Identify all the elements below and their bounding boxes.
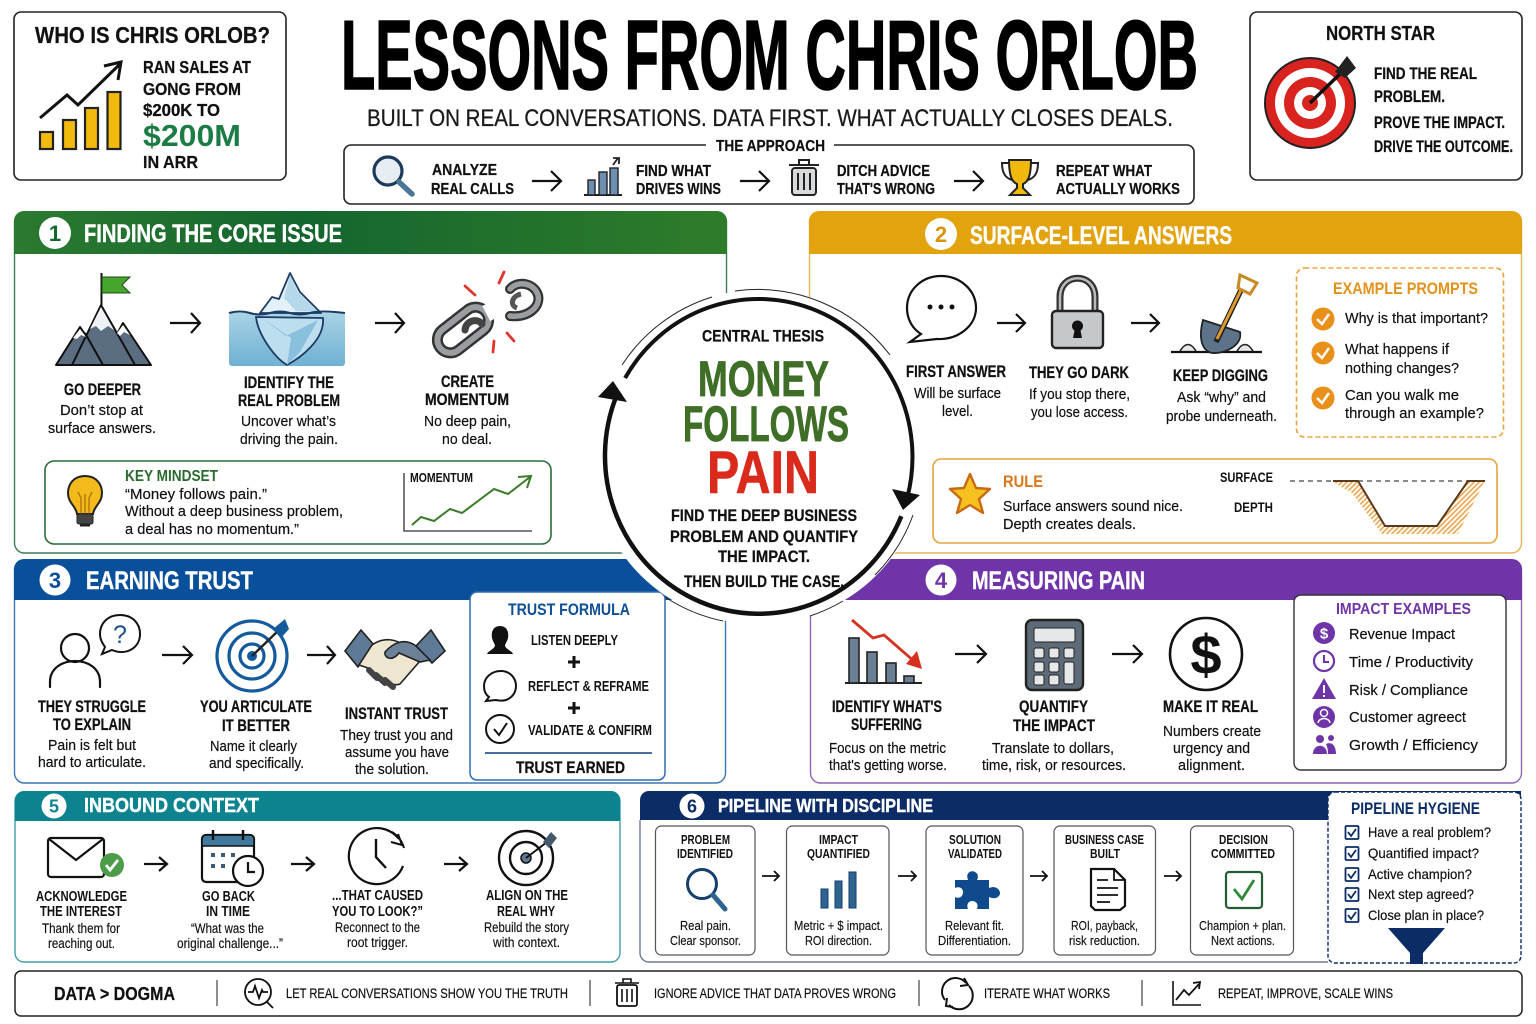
- step: they go dark: THEY GO DARK: [1029, 364, 1129, 382]
- text: prompts: nothing changes?: [1345, 360, 1459, 377]
- icon: magnifier: [374, 157, 412, 194]
- card: impact quantified: QUANTIFIED: [807, 846, 870, 861]
- text: rule: [1003, 472, 1183, 533]
- step: that caused you to look: Reconnect to the: [335, 920, 420, 935]
- card: solution validated: [926, 826, 1023, 955]
- icon: revenue: $: [1320, 626, 1329, 642]
- step: acknowledge: ACKNOWLEDGE: [36, 889, 127, 905]
- icon: calculator: [1026, 620, 1083, 690]
- card: impact quantified: Metric + $ impact.: [794, 918, 883, 933]
- text: prompts: Why is that important?: [1345, 310, 1488, 327]
- panel: the approach: [344, 138, 1194, 204]
- badge 6: 6: [687, 796, 697, 816]
- card: decision committed: Champion + plan.: [1199, 918, 1286, 933]
- heading 2: SURFACE-LEVEL ANSWERS: [970, 222, 1232, 250]
- step: identify the real problem: Uncover what’s: [241, 413, 336, 430]
- arrow: [898, 871, 916, 881]
- step: you articulate: and specifically.: [209, 755, 304, 772]
- icon: shovel: [1171, 275, 1262, 353]
- header 1: [14, 211, 727, 254]
- text: prompts: Can you walk me: [1345, 387, 1459, 404]
- icon: padlock: [1052, 278, 1103, 348]
- callout: key mindset: [45, 461, 551, 544]
- step: quantify the impact: time, risk, or resources.: [982, 757, 1126, 774]
- icon: confused person: ?: [113, 621, 127, 649]
- text: north star lines: PROVE THE IMPACT.: [1374, 114, 1505, 132]
- card: problem identified: Real pain.: [680, 918, 731, 933]
- step: you articulate: IT BETTER: [222, 717, 290, 735]
- step: you articulate: [200, 698, 312, 772]
- badge 5: [42, 794, 66, 818]
- text: formula: [485, 633, 652, 777]
- text: formula: REFLECT & REFRAME: [528, 679, 649, 695]
- icon: iceberg: [229, 273, 345, 366]
- step: ditch advice: DITCH ADVICE: [837, 163, 930, 180]
- icon: email check: [48, 838, 124, 877]
- step: identify what's suffering: IDENTIFY WHAT'S: [832, 698, 942, 716]
- step: identify the real problem: IDENTIFY THE: [244, 374, 334, 392]
- text: impact list: Time / Productivity: [1349, 654, 1473, 671]
- heading: north star: NORTH STAR: [1326, 23, 1435, 45]
- step: they struggle: hard to articulate.: [38, 754, 146, 771]
- icon: trend chart: [1173, 981, 1201, 1005]
- badge 2: 2: [935, 222, 947, 247]
- text: rule: RULE: [1003, 472, 1043, 491]
- card: decision committed: COMMITTED: [1211, 846, 1275, 861]
- chart: momentum line: [404, 471, 532, 531]
- heading: trust formula: TRUST FORMULA: [508, 601, 630, 619]
- icon: dollar circle: [1170, 618, 1242, 690]
- card: business case built: BUILT: [1090, 846, 1120, 861]
- diagram: surface versus depth: [1220, 470, 1485, 534]
- step: that caused you to look: [332, 888, 423, 950]
- text: impact list: Growth / Efficiency: [1349, 737, 1479, 754]
- step: find what drives wins: FIND WHAT: [636, 163, 711, 180]
- subtitle: BUILT ON REAL CONVERSATIONS. DATA FIRST. WHAT ACTUALLY CLOSES DEALS.: [367, 105, 1173, 132]
- card: solution validated: VALIDATED: [948, 846, 1002, 861]
- step: go deeper: GO DEEPER: [64, 381, 141, 399]
- heading 5: INBOUND CONTEXT: [84, 795, 259, 817]
- step: they struggle: [38, 698, 146, 771]
- icon: blue target: [217, 619, 289, 691]
- icon: handshake: [345, 630, 445, 687]
- step: instant trust: assume you have: [345, 744, 449, 761]
- heading 4: MEASURING PAIN: [972, 567, 1145, 595]
- icon: calendar and clock: [202, 830, 263, 886]
- step: create momentum: no deal.: [442, 431, 492, 448]
- icon: people: [1313, 735, 1336, 754]
- step: identify the real problem: [238, 374, 340, 448]
- step: make it real: urgency and: [1173, 740, 1250, 757]
- step: first answer: Will be surface: [914, 385, 1001, 402]
- text: rule: Depth creates deals.: [1003, 516, 1136, 533]
- icon: person silhouette: [487, 626, 513, 654]
- step: align on the real why: [484, 888, 569, 950]
- icon: trophy: [1002, 160, 1038, 195]
- icon: check 3: [1312, 386, 1334, 410]
- icon: revenue: [1313, 622, 1335, 644]
- step: make it real: MAKE IT REAL: [1163, 698, 1258, 716]
- text: impact list: Customer agreect: [1349, 709, 1467, 726]
- heading 3: EARNING TRUST: [86, 567, 253, 595]
- card: problem identified: [656, 826, 755, 955]
- thin outer arcs: [622, 289, 913, 621]
- step: make it real: alignment.: [1178, 757, 1245, 774]
- step: align on the real why: with context.: [492, 935, 560, 950]
- step: they struggle: Pain is felt but: [48, 737, 137, 754]
- arrow: [740, 171, 769, 191]
- chart: momentum line: MOMENTUM: [410, 471, 473, 485]
- panel 1: finding the core issue: [14, 211, 727, 553]
- arrow: [955, 645, 986, 663]
- arrow: [1030, 871, 1047, 881]
- step: instant trust: They trust you and: [340, 727, 453, 744]
- icon: target: [1265, 56, 1356, 148]
- step: they go dark: If you stop there,: [1029, 386, 1130, 403]
- step: keep digging: Ask “why” and: [1177, 389, 1266, 406]
- text: ARR story: $200K TO: [143, 100, 220, 120]
- text: formula: TRUST EARNED: [516, 759, 625, 777]
- icon: align target: [499, 831, 557, 885]
- step: create momentum: No deep pain,: [424, 413, 511, 430]
- icon: dollar circle: $: [1190, 623, 1222, 686]
- step: instant trust: [340, 705, 453, 778]
- card: solution validated: SOLUTION: [949, 832, 1001, 847]
- callout: rule: [933, 459, 1497, 543]
- icon: clock with rewind: [349, 828, 404, 884]
- badge 2: [925, 218, 957, 250]
- text: formula: LISTEN DEEPLY: [531, 633, 618, 649]
- step: that caused you to look: YOU TO LOOK?”: [332, 904, 423, 920]
- text: key mindset: Without a deep business problem,: [125, 503, 343, 520]
- step: keep digging: [1166, 367, 1277, 425]
- heading 6: PIPELINE WITH DISCIPLINE: [718, 796, 933, 816]
- arrow: [532, 171, 561, 191]
- heading: example prompts: EXAMPLE PROMPTS: [1333, 279, 1478, 298]
- text: ignore advice: IGNORE ADVICE THAT DATA PROVES WRONG: [654, 986, 896, 1001]
- text: thesis explanation: [670, 506, 859, 591]
- step: they go dark: [1029, 364, 1130, 421]
- checklist: Have a real problem?: [1368, 824, 1491, 840]
- checklist: [1346, 824, 1491, 923]
- text: impact list: Revenue Impact: [1349, 626, 1456, 643]
- step: identify what's suffering: that's getting worse.: [829, 757, 947, 774]
- panel 5: inbound context: [15, 791, 620, 962]
- icon: customer: [1313, 706, 1335, 728]
- step: keep digging: KEEP DIGGING: [1173, 367, 1268, 385]
- step: that caused you to look: ...THAT CAUSED: [332, 888, 423, 904]
- callout: pipeline hygiene: [1328, 792, 1521, 964]
- ring with arrows: [598, 299, 920, 614]
- text: prompts: What happens if: [1345, 341, 1450, 358]
- text: real conversations: LET REAL CONVERSATIONS SHOW YOU THE TRUTH: [286, 986, 568, 1001]
- text: iterate: ITERATE WHAT WORKS: [984, 986, 1110, 1001]
- diagram: surface versus depth: DEPTH: [1234, 500, 1273, 515]
- step: keep digging: probe underneath.: [1166, 408, 1277, 425]
- step: they go dark: you lose access.: [1031, 404, 1128, 421]
- text: money follows pain: [683, 351, 849, 506]
- step: go deeper: surface answers.: [48, 420, 156, 437]
- icon: waveform magnifier: [245, 979, 273, 1008]
- text: money follows pain: MONEY: [698, 351, 829, 407]
- card: business case built: risk reduction.: [1069, 933, 1140, 948]
- badge 1: 1: [49, 221, 61, 246]
- header 5: [15, 791, 620, 821]
- step: that caused you to look: root trigger.: [347, 935, 408, 950]
- badge 4: 4: [935, 568, 948, 593]
- arrow: [291, 857, 314, 871]
- text: key mindset: a deal has no momentum.”: [125, 521, 299, 538]
- step: quantify the impact: QUANTIFY: [1019, 698, 1088, 716]
- heading: who is chris orlob: WHO IS CHRIS ORLOB?: [35, 22, 270, 48]
- icon: check 1: [1312, 308, 1334, 330]
- icon: growth chart: [40, 62, 121, 149]
- heading 1: FINDING THE CORE ISSUE: [84, 220, 342, 248]
- text: thesis explanation: THEN BUILD THE CASE.: [684, 572, 844, 591]
- icon: light bulb: [68, 476, 102, 526]
- arrow: [307, 646, 335, 664]
- step: acknowledge: reaching out.: [48, 936, 115, 951]
- badge 5: 5: [49, 796, 59, 816]
- step: they struggle: THEY STRUGGLE: [38, 698, 146, 716]
- step: ditch advice: [837, 163, 935, 198]
- badge 3: 3: [49, 568, 61, 593]
- icon: mountain with flag: [56, 273, 151, 365]
- arrow: [444, 857, 467, 871]
- text: ARR story: GONG FROM: [143, 79, 241, 99]
- callout: impact examples: [1294, 595, 1506, 770]
- badge 3: [40, 564, 70, 596]
- arrow: [1131, 314, 1159, 332]
- card: solution validated: Differentiation.: [938, 933, 1011, 948]
- card: decision committed: Next actions.: [1211, 933, 1275, 948]
- icon: star: [950, 474, 990, 513]
- step: make it real: [1163, 698, 1261, 774]
- card: decision committed: [1190, 826, 1294, 955]
- step: go back in time: original challenge...”: [177, 936, 283, 951]
- checklist: Close plan in place?: [1368, 907, 1484, 923]
- heading: the approach: THE APPROACH: [716, 138, 825, 155]
- card: impact quantified: [786, 826, 889, 955]
- checklist: Next step agreed?: [1368, 886, 1474, 902]
- text: impact list: [1349, 626, 1479, 754]
- step: find what drives wins: DRIVES WINS: [636, 181, 721, 198]
- icon: breaking chain: [432, 272, 538, 358]
- card: impact quantified: IMPACT: [819, 832, 858, 847]
- step: you articulate: Name it clearly: [210, 738, 297, 755]
- card: problem identified: PROBLEM: [681, 832, 730, 847]
- icon: check circle: [486, 715, 514, 743]
- step: go back in time: GO BACK: [202, 889, 255, 905]
- step: you articulate: YOU ARTICULATE: [200, 698, 312, 716]
- heading: impact examples: IMPACT EXAMPLES: [1336, 601, 1471, 618]
- text: rule: Surface answers sound nice.: [1003, 498, 1183, 515]
- step: identify what's suffering: [829, 698, 947, 774]
- checklist: Active champion?: [1368, 866, 1472, 882]
- text: prompts: [1345, 310, 1488, 422]
- step: find what drives wins: [636, 163, 721, 198]
- icon: rising bars: [584, 158, 622, 195]
- card: business case built: BUSINESS CASE: [1065, 832, 1144, 847]
- checklist: Quantified impact?: [1368, 845, 1479, 861]
- arrow: [762, 871, 779, 881]
- header 2: [809, 211, 1522, 254]
- text: prompts: through an example?: [1345, 405, 1484, 422]
- step: identify the real problem: driving the pain.: [240, 431, 338, 448]
- text: thesis explanation: PROBLEM AND QUANTIFY: [670, 527, 859, 546]
- card: decision committed: DECISION: [1219, 832, 1268, 847]
- step: acknowledge: [36, 889, 127, 951]
- step: first answer: level.: [942, 403, 973, 420]
- text: ARR story: $200M: [143, 118, 241, 153]
- step: quantify the impact: Translate to dollars,: [992, 740, 1114, 757]
- step: first answer: [906, 363, 1006, 420]
- panel 3: earning trust: [14, 559, 726, 783]
- step: analyze: ANALYZE: [432, 162, 497, 179]
- step: analyze: [431, 162, 514, 198]
- text: thesis explanation: THE IMPACT.: [718, 547, 810, 566]
- text: money follows pain: PAIN: [707, 439, 819, 506]
- panel 2: surface-level answers: [809, 211, 1522, 553]
- arrow: [1112, 645, 1142, 663]
- step: go back in time: [177, 889, 283, 951]
- badge 6: [680, 794, 704, 818]
- icon: trash: [615, 979, 639, 1006]
- card: impact quantified: ROI direction.: [805, 933, 872, 948]
- step: go deeper: Don’t stop at: [60, 402, 144, 419]
- text: repeat: REPEAT, IMPROVE, SCALE WINS: [1218, 986, 1393, 1001]
- step: identify the real problem: REAL PROBLEM: [238, 392, 340, 410]
- arrow: [997, 314, 1025, 332]
- arrow: [954, 171, 983, 191]
- badge 1: [39, 217, 71, 249]
- card: solution validated: Relevant fit.: [945, 918, 1004, 933]
- text: key mindset: KEY MINDSET: [125, 468, 218, 485]
- panel: north star: [1250, 12, 1522, 180]
- step: align on the real why: Rebuild the story: [484, 920, 569, 935]
- step: repeat what works: ACTUALLY WORKS: [1056, 181, 1180, 198]
- panel 4: measuring pain: [810, 559, 1522, 783]
- step: go deeper: [48, 381, 156, 437]
- card: problem identified: Clear sponsor.: [670, 933, 741, 948]
- text: formula: VALIDATE & CONFIRM: [528, 723, 652, 739]
- step: repeat what works: [1056, 163, 1180, 198]
- text: central thesis label: CENTRAL THESIS: [702, 326, 824, 346]
- step: instant trust: the solution.: [355, 761, 429, 778]
- footer strip: [15, 971, 1522, 1016]
- step: identify what's suffering: SUFFERING: [851, 716, 922, 734]
- text: north star lines: FIND THE REAL: [1374, 65, 1477, 83]
- step: quantify the impact: [982, 698, 1126, 774]
- text: key mindset: [125, 468, 343, 538]
- icon: chat bubble: [484, 671, 516, 701]
- card: business case built: ROI, payback,: [1071, 918, 1138, 933]
- text: thesis explanation: FIND THE DEEP BUSINESS: [671, 506, 857, 525]
- step: ditch advice: THAT'S WRONG: [837, 181, 935, 198]
- text: ARR story: IN ARR: [143, 152, 198, 172]
- panel 6: pipeline with discipline: [640, 791, 1521, 964]
- text: key mindset: “Money follows pain.”: [125, 486, 267, 503]
- icon: clock: [1314, 651, 1334, 671]
- step: they struggle: TO EXPLAIN: [53, 716, 131, 734]
- step: go back in time: “What was the: [191, 921, 264, 936]
- icon: cycle arrows: [942, 978, 973, 1009]
- text: impact list: Risk / Compliance: [1349, 682, 1468, 699]
- panel 6 outline: [640, 820, 1328, 962]
- text: money follows pain: FOLLOWS: [683, 396, 849, 452]
- step: acknowledge: Thank them for: [42, 921, 120, 936]
- text: ARR story: RAN SALES AT: [143, 57, 251, 77]
- arrow: [375, 313, 404, 333]
- text: north star lines: [1374, 65, 1513, 156]
- step: make it real: Numbers create: [1163, 723, 1261, 740]
- callout: example prompts: [1296, 268, 1504, 437]
- halo: [592, 290, 926, 624]
- icon: trash: [789, 160, 819, 195]
- header 4: [810, 559, 1522, 600]
- step: repeat what works: REPEAT WHAT: [1056, 163, 1152, 180]
- panel: who is Chris Orlob: [14, 12, 286, 180]
- step: analyze: REAL CALLS: [431, 181, 514, 198]
- central thesis: [592, 289, 926, 624]
- card: business case built: [1054, 826, 1156, 955]
- arrow: [144, 857, 167, 871]
- step: go back in time: IN TIME: [206, 904, 250, 920]
- step: align on the real why: REAL WHY: [497, 904, 555, 920]
- icon: funnel: [1388, 928, 1445, 964]
- icon: check 2: [1312, 342, 1334, 364]
- text: data over dogma: DATA > DOGMA: [54, 983, 175, 1004]
- card: problem identified: IDENTIFIED: [677, 846, 733, 861]
- icon: warning triangle: [1312, 678, 1336, 699]
- arrow: [170, 313, 200, 333]
- step: create momentum: CREATE: [441, 373, 494, 391]
- callout: trust formula: [470, 592, 665, 780]
- text: north star lines: PROBLEM.: [1374, 88, 1445, 106]
- step: first answer: FIRST ANSWER: [906, 363, 1006, 381]
- step: acknowledge: THE INTEREST: [40, 904, 122, 920]
- step: instant trust: INSTANT TRUST: [345, 705, 448, 723]
- badge 4: [926, 564, 956, 596]
- header 3: [14, 559, 726, 600]
- text: ARR story: [143, 57, 251, 172]
- icon: declining bars: [845, 620, 922, 683]
- arrow: [1164, 871, 1181, 881]
- arrow: [162, 646, 192, 664]
- diagram: surface versus depth: SURFACE: [1220, 470, 1273, 485]
- step: create momentum: [424, 373, 511, 448]
- icon: speech bubble: [907, 276, 976, 342]
- step: quantify the impact: THE IMPACT: [1013, 717, 1095, 735]
- heading: pipeline hygiene: PIPELINE HYGIENE: [1351, 800, 1480, 818]
- step: identify what's suffering: Focus on the metric: [829, 740, 946, 757]
- step: align on the real why: ALIGN ON THE: [486, 888, 568, 904]
- step: create momentum: MOMENTUM: [425, 391, 509, 409]
- icon: confused person: [50, 615, 140, 687]
